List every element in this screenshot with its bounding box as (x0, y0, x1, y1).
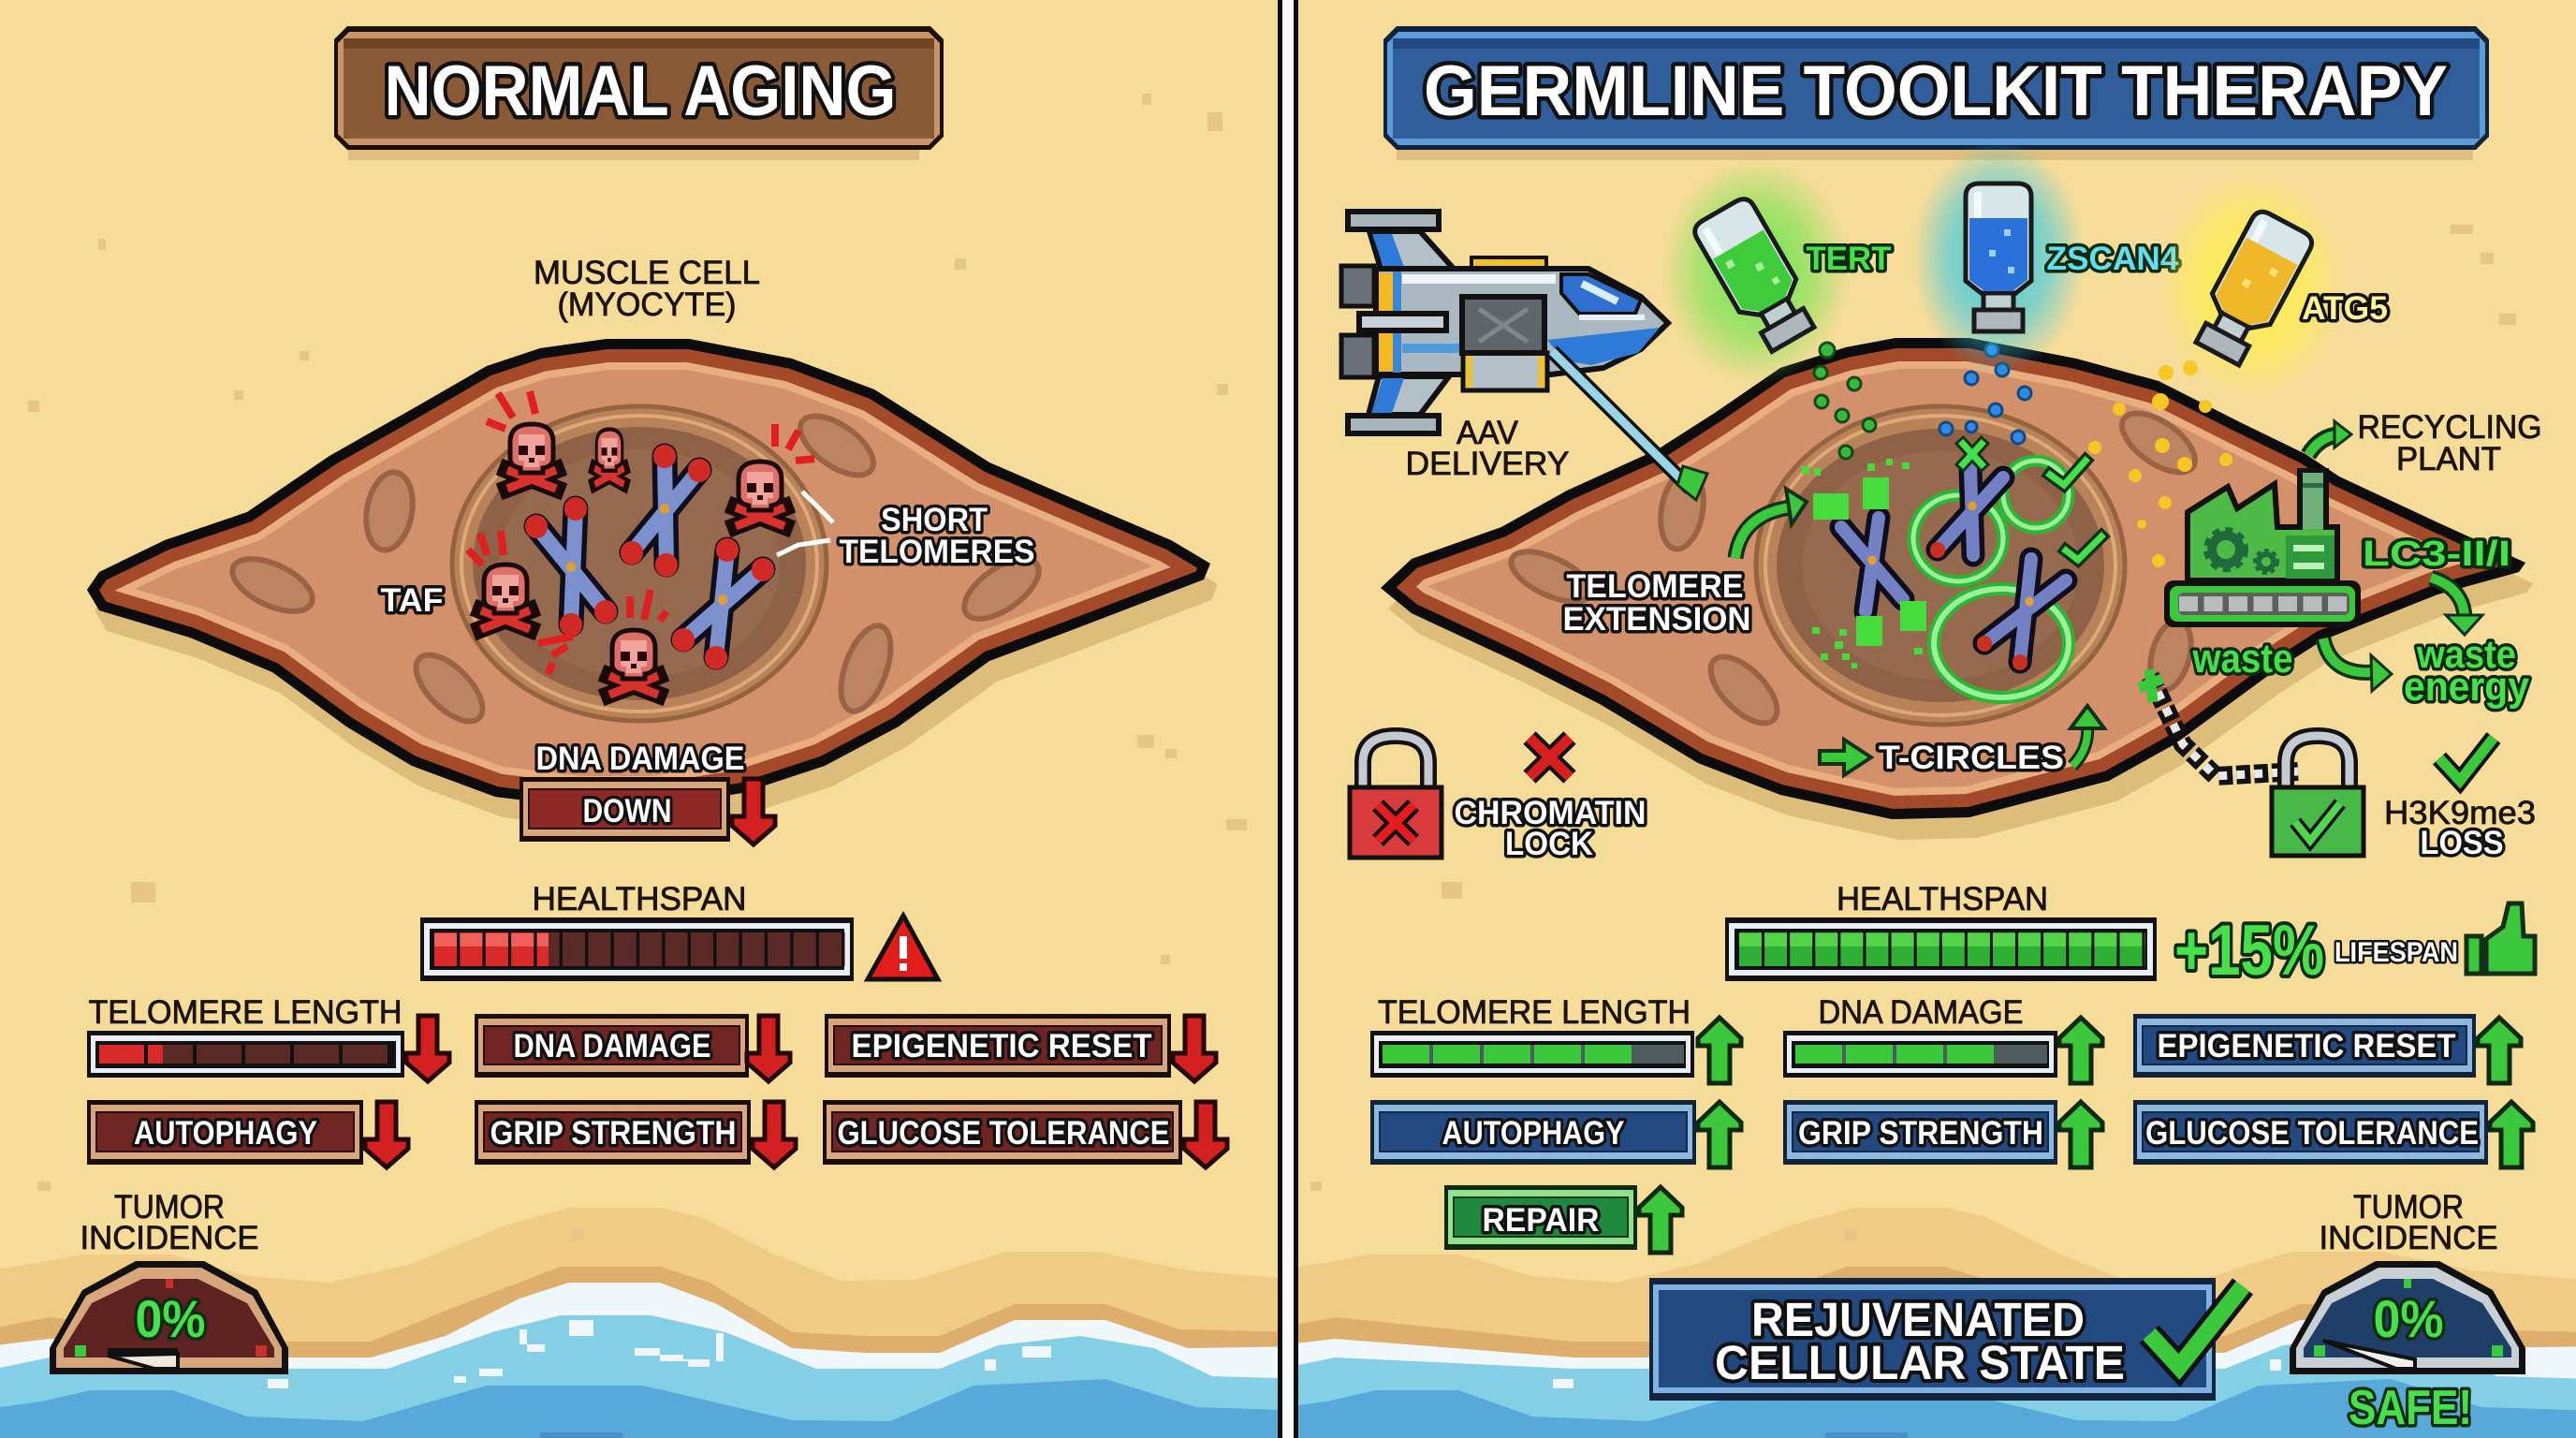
bar: dna damage (1783, 1031, 2057, 1078)
vial: atg5 (2188, 208, 2316, 369)
text: lifespan: LIFESPAN (2334, 937, 2458, 968)
arrow: t-circles right (1820, 740, 1871, 775)
arrow: lc3 to waste energy (2431, 578, 2482, 635)
metric: autophagy: AUTOPHAGY (134, 1115, 317, 1152)
arrow: repair up (1639, 1187, 1682, 1253)
damage sparks (468, 391, 814, 674)
label: short telomeres: TELOMERES (839, 534, 1035, 570)
label: h3k9me3 loss: LOSS (2421, 825, 2503, 861)
label: aav delivery (1406, 415, 1569, 482)
metric: dna damage (475, 1014, 749, 1078)
metric: autophagy (1370, 1100, 1696, 1165)
metric: repair (1444, 1185, 1637, 1250)
banner: rejuvenated cellular state (1649, 1278, 2216, 1401)
arrow: autophagy up (1698, 1102, 1741, 1167)
label: waste energy: waste (2416, 632, 2516, 676)
status: down plaque (520, 777, 730, 842)
arrow: dna damage down (747, 1016, 790, 1081)
title: normal aging: NORMAL AGING (384, 51, 897, 131)
bar: telomere length (1370, 1031, 1694, 1078)
label: dna damage: DNA DAMAGE (1818, 994, 2024, 1031)
label: telomere extension: EXTENSION (1563, 601, 1750, 638)
short telomere leader lines (777, 492, 833, 555)
beach waves: left panel (0, 1208, 1310, 1438)
metric: dna damage: DNA DAMAGE (513, 1028, 711, 1064)
bar: telomere length (87, 1031, 404, 1078)
arrow: grip down (753, 1102, 796, 1167)
label: h3k9me3 loss: H3K9me3 (2384, 795, 2536, 831)
label: taf: TAF (380, 582, 444, 619)
text: +15%: +15% (2174, 911, 2324, 990)
heading: muscle cell (534, 255, 760, 323)
beach waves: right panel (1257, 1208, 2576, 1438)
metric: grip strength (475, 1100, 751, 1165)
label: aav delivery: DELIVERY (1406, 446, 1569, 482)
arrow: epigenetic down (1173, 1016, 1216, 1081)
label: atg5: ATG5 (2302, 290, 2388, 327)
metric: autophagy: AUTOPHAGY (1442, 1115, 1625, 1152)
metric: glucose tolerance (2133, 1100, 2488, 1165)
label: recycling plant: RECYCLING (2357, 409, 2542, 446)
label: zscan4: ZSCAN4 (2046, 241, 2179, 277)
label: chromatin lock: LOCK (1505, 826, 1593, 862)
label: telomere extension: TELOMERE (1567, 568, 1743, 605)
nucleus (452, 406, 827, 721)
label: tumor incidence left (80, 1189, 258, 1256)
metric: grip strength (1783, 1100, 2057, 1165)
gauge: tumor right (2290, 1261, 2525, 1374)
icon: green check (2439, 738, 2494, 781)
banner: rejuvenated cellular state: REJUVENATED (1751, 1293, 2085, 1346)
arrow: aav beam (1552, 351, 1707, 500)
label: waste energy: energy (2404, 664, 2529, 710)
rocket: aav delivery (1341, 212, 1668, 433)
metric: epigenetic reset: EPIGENETIC RESET (2157, 1028, 2456, 1064)
glow: zscan4 (1912, 140, 2085, 374)
label: h3k9me3 loss (2384, 795, 2536, 861)
checks and x on chromosomes (1963, 444, 2101, 560)
particles: yellow (2088, 360, 2232, 567)
label: telomere length: TELOMERE LENGTH (88, 994, 402, 1031)
divider (1278, 0, 1298, 1438)
glow: tert (1662, 159, 1850, 384)
gauge: tumor right: 0% (2374, 1289, 2443, 1348)
chromosomes (536, 456, 763, 658)
label: tumor incidence right: TUMOR (2353, 1189, 2464, 1225)
icon: big check (2149, 1286, 2243, 1367)
status: down plaque: DOWN (582, 793, 672, 829)
label: tumor incidence right (2320, 1189, 2497, 1256)
label: short telomeres (839, 502, 1035, 570)
arrow: dna damage up (2059, 1018, 2102, 1083)
glow: atg5 (2159, 173, 2346, 398)
arrow: autophagy down (365, 1102, 408, 1167)
metric: repair: REPAIR (1483, 1202, 1599, 1239)
particles: blue (1939, 344, 2031, 444)
text: safe: SAFE! (2349, 1381, 2472, 1435)
skulls: TAF foci (481, 424, 784, 695)
metric: glucose tolerance: GLUCOSE TOLERANCE (2145, 1115, 2479, 1152)
metric: grip strength: GRIP STRENGTH (1798, 1115, 2043, 1152)
telomere extension particles (1802, 459, 1926, 668)
icon: recycling factory (2164, 471, 2361, 627)
label: aav delivery: AAV (1456, 415, 1519, 451)
arrow: glucose down (1184, 1102, 1227, 1167)
arrow: down (732, 779, 775, 844)
label: chromatin lock (1455, 795, 1646, 862)
label: dna damage on cell: DNA DAMAGE (535, 741, 745, 777)
label: tert: TERT (1807, 241, 1891, 277)
vial: zscan4 (1966, 183, 2031, 331)
arrow: extension (1735, 489, 1807, 558)
metric: epigenetic reset (825, 1014, 1171, 1078)
metric: epigenetic reset: EPIGENETIC RESET (852, 1028, 1151, 1064)
metric: autophagy (87, 1100, 363, 1165)
particles: green (1814, 343, 1876, 459)
label: telomere length: TELOMERE LENGTH (1378, 994, 1690, 1031)
arrow: waste flow (2323, 638, 2392, 691)
chromosomes (1841, 468, 2066, 663)
bar: healthspan right (1725, 917, 2157, 981)
arrow: glucose up (2490, 1102, 2533, 1167)
label: lc3: LC3-II/I (2363, 535, 2510, 574)
title: normal aging (334, 26, 944, 160)
arrow: epigenetic up (2478, 1018, 2521, 1083)
metric: glucose tolerance (823, 1100, 1182, 1165)
bar: healthspan left (420, 917, 854, 981)
icon: red x (1530, 738, 1570, 777)
label: telomere extension (1563, 568, 1750, 638)
icon: thumbs up (2466, 903, 2535, 974)
arrow: telomere up (1698, 1018, 1741, 1083)
icon: green padlock (2272, 736, 2364, 856)
title: germline toolkit therapy (1383, 26, 2489, 160)
mitochondria (225, 404, 1048, 732)
arrow: t-circles up (2071, 706, 2104, 766)
metric: epigenetic reset (2133, 1014, 2476, 1078)
arrow: grip up (2059, 1102, 2102, 1167)
label: waste energy (2404, 632, 2529, 710)
heading: muscle cell: MUSCLE CELL (534, 255, 760, 291)
label: t-circles: T-CIRCLES (1879, 740, 2064, 776)
sand specks (28, 94, 2516, 1240)
heading: muscle cell: (MYOCYTE) (558, 286, 736, 323)
metric: glucose tolerance: GLUCOSE TOLERANCE (837, 1115, 1170, 1152)
label: healthspan right: HEALTHSPAN (1837, 881, 2048, 917)
chain (2139, 669, 2298, 776)
icon: red padlock (1350, 736, 1442, 858)
label: short telomeres: SHORT (881, 502, 988, 538)
panel: treated myocyte (1381, 338, 2533, 840)
label: tumor incidence right: INCIDENCE (2320, 1220, 2497, 1256)
mitochondria (1504, 402, 2204, 734)
metrics: left panel (87, 994, 1227, 1167)
metric: grip strength: GRIP STRENGTH (490, 1115, 736, 1152)
metrics: right panel (1370, 994, 2533, 1253)
t-circles (1913, 461, 2069, 697)
gauge: tumor left: 0% (135, 1289, 206, 1348)
gauge: tumor left (50, 1261, 288, 1374)
label: tumor incidence left: TUMOR (114, 1189, 225, 1225)
banner: rejuvenated cellular state: CELLULAR STATE (1715, 1336, 2125, 1389)
label: recycling plant (2357, 409, 2542, 477)
label: waste: waste (2192, 636, 2293, 682)
icon: warning (868, 916, 938, 979)
arrow: chimney exhaust (2308, 421, 2351, 455)
nucleus (1756, 406, 2125, 725)
panel: aged myocyte (87, 339, 1218, 828)
arrow: telomere down (406, 1016, 449, 1081)
label: recycling plant: PLANT (2396, 441, 2501, 477)
label: healthspan left: HEALTHSPAN (532, 881, 747, 917)
label: tumor incidence left: INCIDENCE (80, 1220, 258, 1256)
label: chromatin lock: CHROMATIN (1455, 795, 1646, 831)
vial: tert (1690, 195, 1822, 356)
title: germline toolkit therapy: GERMLINE TOOLKIT THERAPY (1424, 51, 2448, 131)
